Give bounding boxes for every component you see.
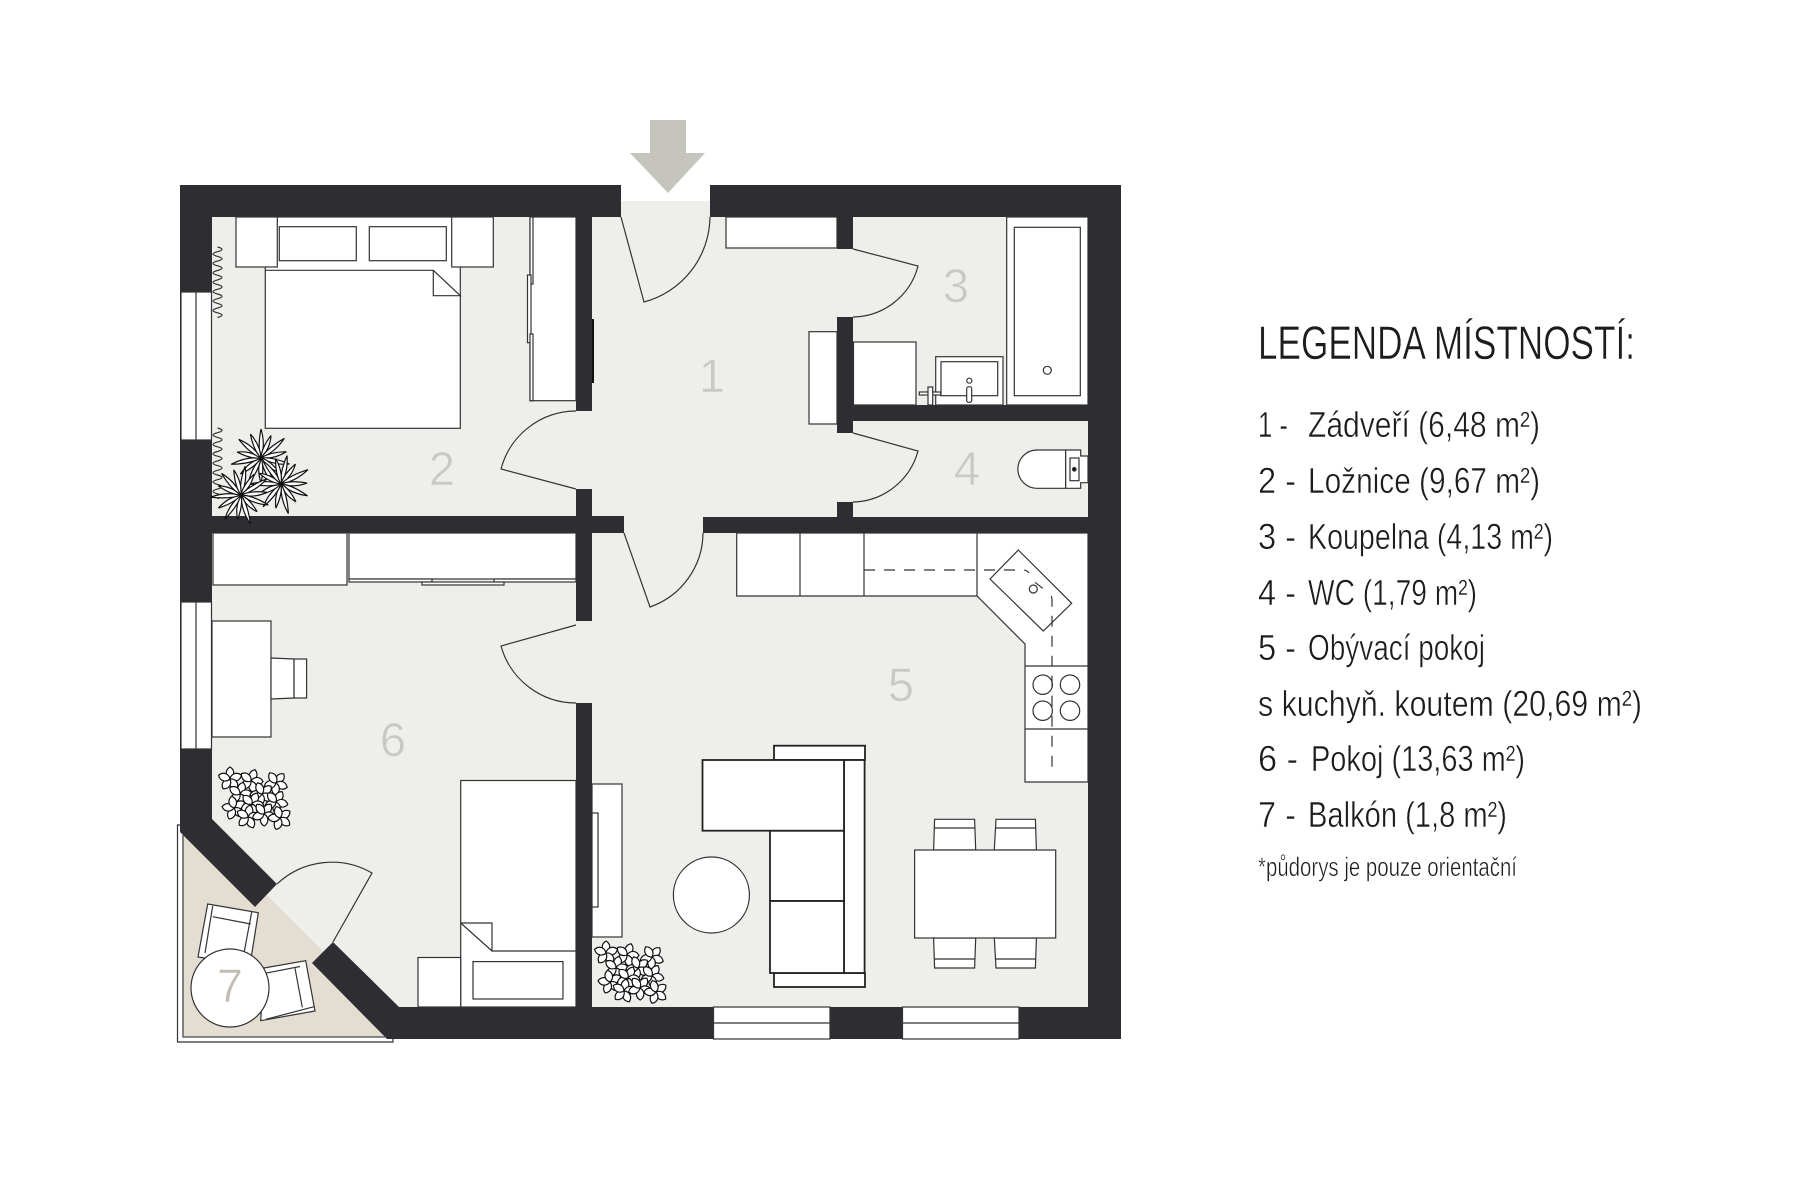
balcony chair 1 [198, 904, 258, 965]
balcony railing [178, 825, 393, 1042]
legend row 7 [1258, 794, 1507, 835]
plant: room 6 [217, 765, 297, 835]
nightstands and pillows [236, 217, 493, 267]
walls [180, 185, 1121, 1039]
interior floor [196, 201, 1100, 1020]
legend row 6 [1258, 738, 1525, 779]
doors [277, 217, 918, 942]
kitchen [737, 533, 1088, 782]
legend row 7: Balkón (1,8 m²) [1308, 794, 1507, 835]
legend row 2: Ložnice (9,67 m²) [1308, 460, 1540, 501]
bathtub [1007, 217, 1088, 405]
closet [213, 533, 347, 585]
legend row 4: WC (1,79 m²) [1308, 572, 1477, 613]
legend row 5: Obývací pokoj [1308, 627, 1485, 668]
plant: living room [593, 939, 673, 1009]
kitchen sink [990, 550, 1072, 631]
sofa [702, 746, 865, 987]
hall furniture [726, 217, 837, 424]
room numbers: 5 [888, 658, 914, 711]
footnote: *půdorys je pouze orientační [1258, 852, 1517, 882]
plant: bedroom [207, 429, 315, 527]
room numbers: 1 [699, 349, 725, 402]
room 6 furniture [212, 533, 576, 1007]
nightstand [418, 958, 461, 1007]
room numbers: 6 [380, 713, 406, 766]
legend [1258, 316, 1642, 882]
sink [936, 357, 1003, 405]
legend row 4: 4 - [1258, 572, 1296, 613]
kitchen counter [737, 533, 1088, 782]
legend row 7: 7 - [1258, 794, 1296, 835]
room numbers: 7 [217, 959, 243, 1012]
desk [212, 621, 271, 737]
legend row 6: Pokoj (13,63 m²) [1311, 738, 1525, 779]
desk chair [271, 658, 307, 699]
wall cabinets dashed [864, 570, 1052, 773]
legend row 5: 5 - [1258, 627, 1296, 668]
dining table [915, 850, 1056, 938]
legend row 3: 3 - [1258, 516, 1296, 557]
washing machine [854, 342, 916, 405]
entrance arrow [630, 120, 705, 193]
bed [265, 217, 460, 428]
window: living room left [714, 1007, 830, 1039]
toilet [1018, 450, 1088, 488]
legend row 3 [1258, 516, 1553, 557]
balcony table [191, 949, 269, 1027]
room numbers: 3 [943, 259, 969, 312]
dining chairs [934, 819, 1036, 968]
living room furniture [592, 746, 1056, 987]
TV unit [592, 784, 622, 937]
window: bedroom [181, 292, 212, 440]
legend row 3: Koupelna (4,13 m²) [1308, 516, 1553, 557]
balcony furniture [191, 904, 315, 1027]
room numbers [217, 259, 980, 1012]
room numbers: 4 [954, 442, 980, 495]
bedroom wardrobe [528, 217, 576, 401]
bedroom furniture [236, 217, 576, 428]
tap [919, 387, 941, 405]
legend title: LEGENDA MÍSTNOSTÍ: [1258, 316, 1635, 369]
window: room 6 [181, 602, 212, 749]
bathroom fixtures [854, 217, 1088, 405]
legend row 2: 2 - [1258, 460, 1296, 501]
legend row 6: 6 - [1258, 738, 1298, 779]
balcony chair 2 [261, 961, 315, 1021]
room numbers: 2 [429, 442, 455, 495]
coffee table [673, 857, 749, 933]
legend row 1: Zádveří (6,48 m²) [1308, 404, 1540, 445]
window: living room right [902, 1007, 1019, 1039]
single bed [461, 780, 576, 1007]
legend row 5 [1258, 627, 1485, 668]
balcony floor [183, 811, 409, 1037]
curtains [213, 247, 222, 499]
hob [1033, 675, 1080, 720]
legend row 5 continued: s kuchyň. koutem (20,69 m²) [1258, 683, 1642, 724]
legend row 1: 1 - [1258, 404, 1288, 445]
sliding wardrobe [349, 533, 576, 585]
legend row 4 [1258, 572, 1477, 613]
